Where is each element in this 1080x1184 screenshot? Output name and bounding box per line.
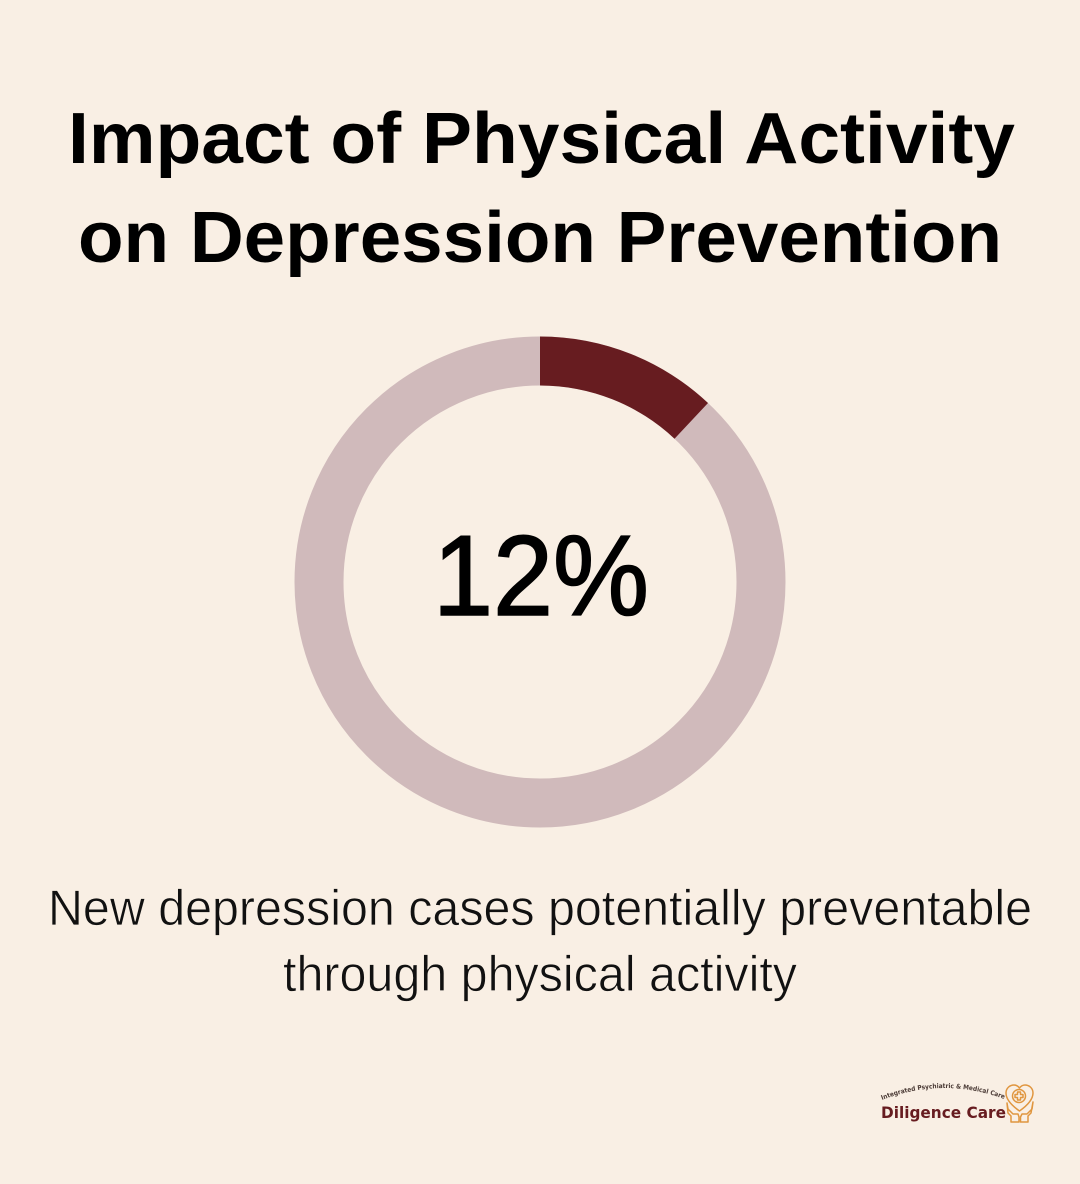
donut chart: 12%	[319, 336, 761, 803]
title: on Depression Prevention	[78, 198, 1002, 278]
logo name: Diligence Care	[881, 1103, 1006, 1122]
donut value: 12%	[433, 513, 649, 640]
logo icon: heart and hands	[1006, 1085, 1033, 1122]
logo tagline: Integrated Psychiatric & Medical Care	[880, 1083, 1005, 1100]
description: through physical activity	[283, 946, 797, 1002]
logo: Diligence Care	[880, 1083, 1034, 1123]
donut track	[319, 361, 761, 803]
title	[68, 99, 1015, 278]
description: New depression cases potentially preventable	[48, 880, 1032, 936]
title: Impact of Physical Activity	[68, 99, 1015, 179]
donut highlighted segment	[540, 336, 708, 439]
description	[48, 880, 1032, 1002]
